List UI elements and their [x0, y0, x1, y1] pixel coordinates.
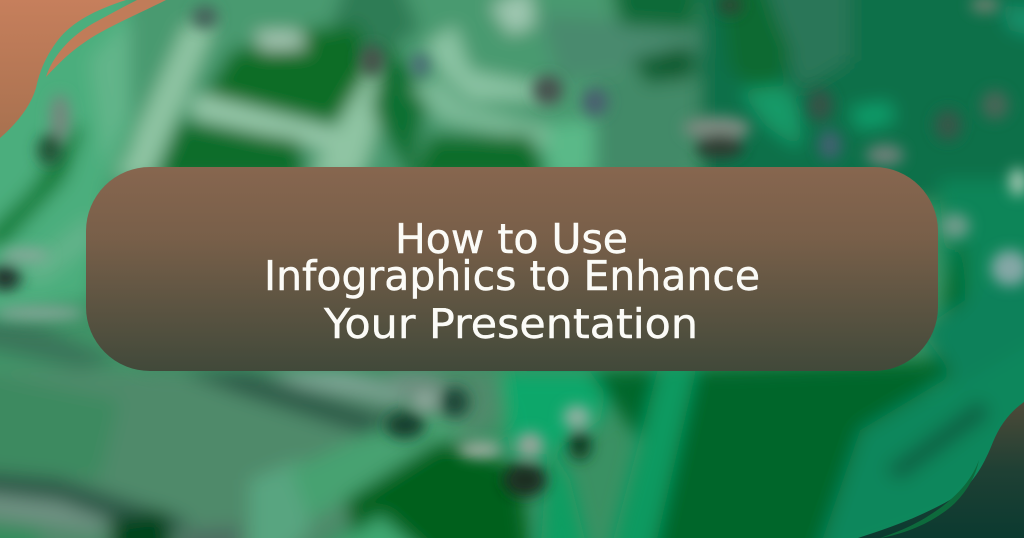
title panel [86, 167, 938, 371]
bottom-centre [290, 410, 470, 520]
bottom-right dark green [590, 360, 960, 538]
title text [264, 215, 760, 348]
right band [938, 180, 1024, 400]
decorative wave: bottom-right corner [858, 402, 1024, 538]
bottom-left [0, 370, 510, 538]
right top [700, 0, 1024, 200]
centre-top base [130, 0, 720, 175]
decorative wave: top-left corner [0, 0, 166, 138]
title text: Your Presentation [323, 300, 698, 348]
left region [0, 0, 190, 320]
title text: Infographics to Enhance [264, 252, 760, 300]
title text: How to Use [395, 215, 628, 263]
